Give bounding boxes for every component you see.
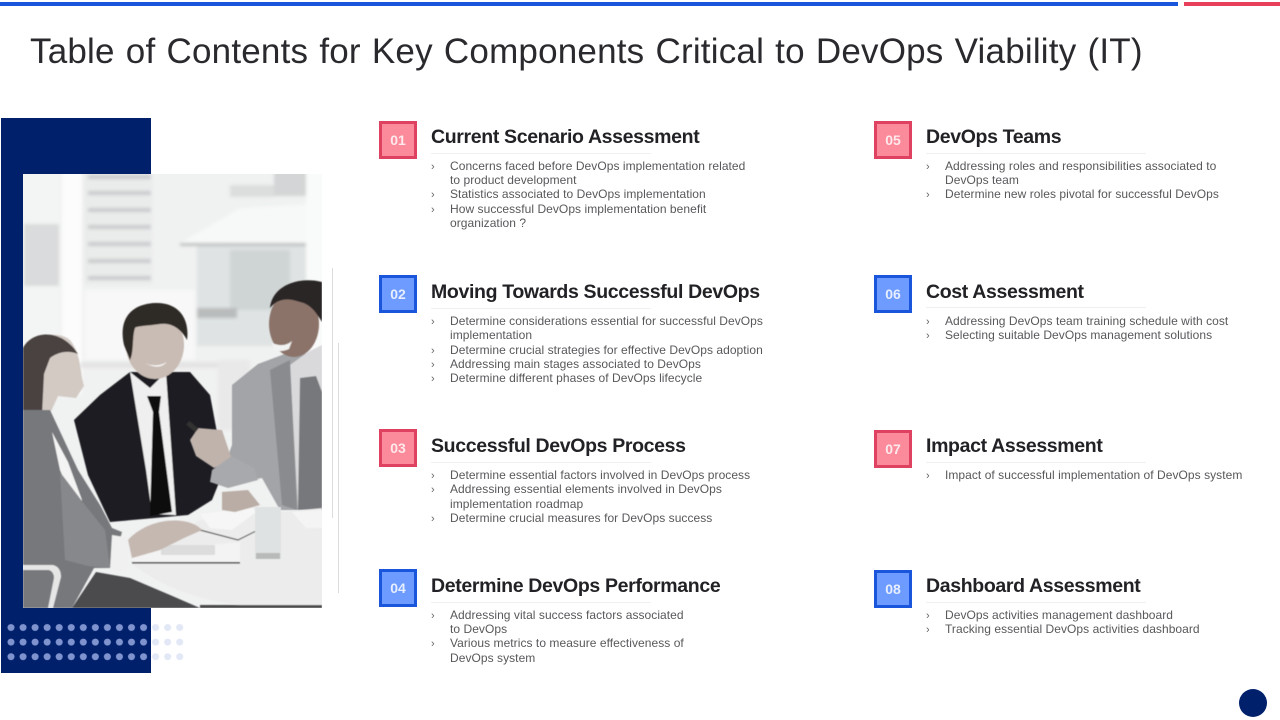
list 05	[926, 159, 1219, 201]
heading 05: DevOps Teams	[926, 126, 1061, 148]
badge 01: 01	[390, 132, 406, 148]
list 02: Determine considerations essential for successful DevOps	[450, 314, 763, 328]
heading 04: Determine DevOps Performance	[431, 575, 720, 597]
top accent bar: red	[1184, 2, 1280, 6]
badge 02: 02	[390, 286, 406, 302]
badge 07	[874, 430, 912, 468]
panel: item 05	[874, 121, 1219, 201]
page marker circle	[1239, 689, 1267, 717]
badge 08	[874, 570, 912, 608]
list 03	[432, 468, 750, 525]
list 02: Addressing main stages associated to DevOps	[450, 357, 701, 371]
list 02: implementation	[450, 328, 532, 342]
list 06: Selecting suitable DevOps management solutions	[945, 328, 1212, 342]
heading 03: Successful DevOps Process	[431, 435, 686, 457]
title: Table of Contents for Key Components Critical to DevOps Viability (IT)	[30, 32, 1143, 71]
thin vertical divider	[338, 343, 339, 593]
badge 01	[379, 121, 417, 159]
badge 04	[379, 569, 417, 607]
list 02: Determine different phases of DevOps lifecycle	[450, 371, 702, 385]
right man	[222, 280, 322, 510]
list 07: Impact of successful implementation of DevOps system	[945, 468, 1242, 482]
list 03: Determine essential factors involved in DevOps process	[450, 468, 750, 482]
panel: item 03	[379, 429, 750, 525]
panel: item 07	[874, 430, 1242, 482]
list 01: Concerns faced before DevOps implementation related	[450, 159, 745, 173]
badge 05	[874, 121, 912, 159]
badge 03: 03	[390, 440, 406, 456]
list 03: Determine crucial measures for DevOps success	[450, 511, 712, 525]
badge 08: 08	[885, 581, 901, 597]
list 04: Various metrics to measure effectiveness of	[450, 636, 684, 650]
badge 03	[379, 429, 417, 467]
list 08: Tracking essential DevOps activities dashboard	[945, 622, 1200, 636]
badge 06: 06	[885, 286, 901, 302]
list 03: Addressing essential elements involved in DevOps	[450, 482, 722, 496]
heading 01: Current Scenario Assessment	[431, 126, 699, 148]
badge 02	[379, 275, 417, 313]
panel: item 02	[379, 275, 763, 385]
heading 06: Cost Assessment	[926, 281, 1084, 303]
list 05: Addressing roles and responsibilities associated to	[945, 159, 1216, 173]
panel: item 04	[379, 569, 720, 665]
list 04: DevOps system	[450, 651, 535, 665]
list 04	[432, 608, 684, 665]
list 06: Addressing DevOps team training schedule with cost	[945, 314, 1228, 328]
badge 06	[874, 275, 912, 313]
top accent bar: blue	[0, 2, 1178, 6]
badge 07: 07	[885, 441, 901, 457]
table and papers	[130, 507, 322, 608]
list 03: implementation roadmap	[450, 497, 583, 511]
thin vertical divider	[332, 268, 333, 518]
hands and sleeve	[186, 421, 260, 512]
panel: item 06	[874, 275, 1228, 342]
blurred office window background	[23, 174, 308, 608]
photo: business team at meeting table	[23, 174, 322, 608]
list 04: to DevOps	[450, 622, 507, 636]
panel: item 01	[379, 121, 745, 230]
badge 04: 04	[390, 580, 406, 596]
list 08: DevOps activities management dashboard	[945, 608, 1173, 622]
list 04: Addressing vital success factors associated	[450, 608, 684, 622]
badge 05: 05	[885, 132, 901, 148]
list 01: How successful DevOps implementation benefit	[450, 202, 706, 216]
list 01: organization ?	[450, 216, 526, 230]
list 02: Determine crucial strategies for effective DevOps adoption	[450, 343, 763, 357]
list 05: DevOps team	[945, 173, 1019, 187]
list 02	[432, 314, 763, 385]
heading 08: Dashboard Assessment	[926, 575, 1140, 597]
panel: item 08	[874, 570, 1200, 636]
list 08	[926, 608, 1200, 636]
heading 07: Impact Assessment	[926, 435, 1102, 457]
list 01: to product development	[450, 173, 577, 187]
list 06	[926, 314, 1228, 342]
list 01: Statistics associated to DevOps implementation	[450, 187, 706, 201]
navy backing panel	[1, 118, 151, 673]
list 01	[432, 159, 745, 230]
heading 02: Moving Towards Successful DevOps	[431, 281, 760, 303]
list 05: Determine new roles pivotal for successful DevOps	[945, 187, 1219, 201]
middle man	[74, 303, 224, 522]
dot pattern	[7, 624, 184, 660]
woman	[23, 334, 202, 608]
